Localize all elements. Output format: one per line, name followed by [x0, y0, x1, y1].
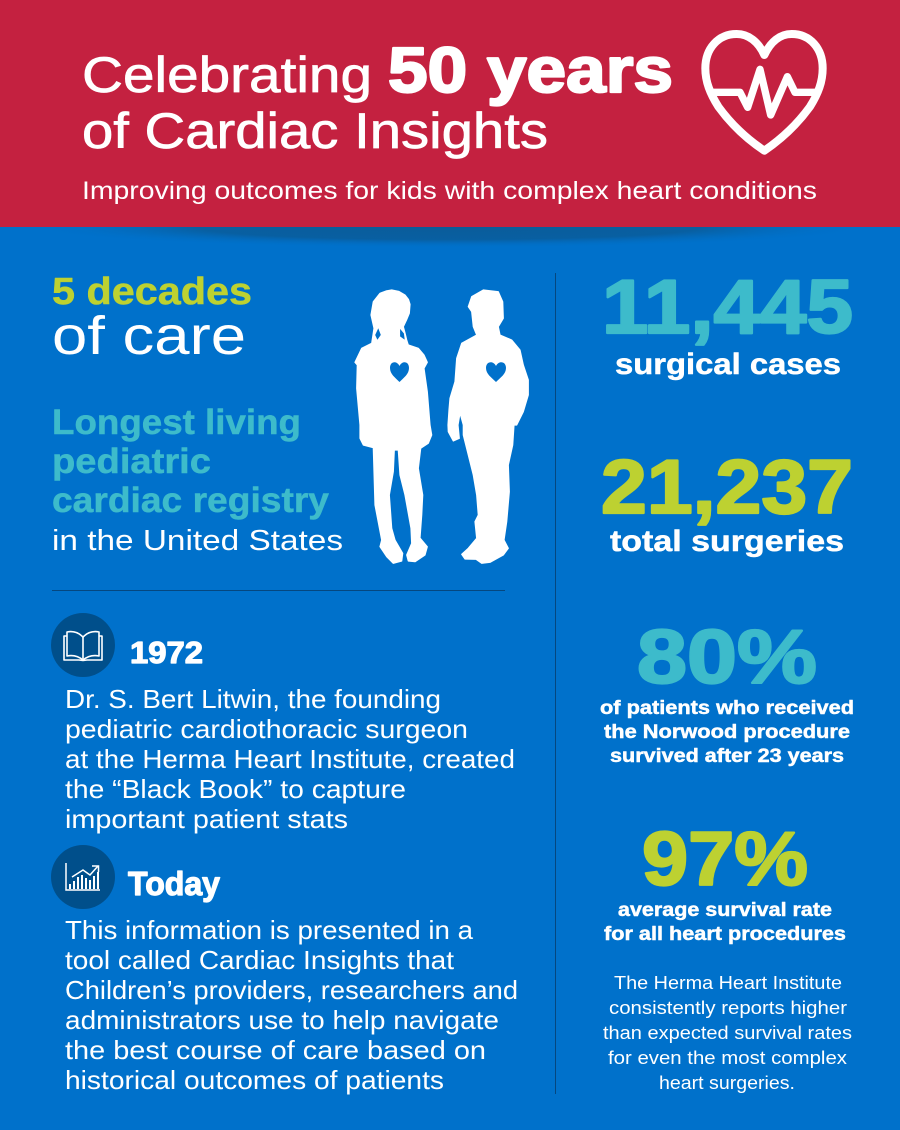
stat: surgical cases: 11,445	[602, 265, 853, 350]
text block: today description	[65, 915, 518, 1095]
text block: today description: administrators use to help navigate	[65, 1005, 499, 1035]
text block: longest living registry: pediatric	[52, 442, 211, 481]
stat: average survival: for all heart procedures	[604, 923, 846, 945]
icon: heart with pulse line	[705, 34, 823, 151]
text block: survival note: consistently reports higher	[609, 998, 847, 1018]
text block: today description: This information is presented in a	[65, 915, 474, 945]
title: of Cardiac Insights	[82, 103, 548, 159]
heading: 1972: 1972	[130, 635, 203, 670]
header banner	[0, 0, 900, 227]
icon: girl heart	[390, 362, 409, 382]
stat: average survival: average survival rate	[618, 899, 832, 921]
illustration: child silhouettes with hearts	[355, 290, 528, 563]
heading: 5 decades of care	[52, 271, 252, 366]
stat: surgical cases: surgical cases	[615, 348, 841, 381]
text block: 1972 description: Dr. S. Bert Litwin, the founding	[65, 684, 441, 714]
text block: 1972 description: at the Herma Heart Institute, created	[65, 744, 515, 774]
title: 50 years	[388, 34, 673, 106]
text block: longest living registry: in the United States	[52, 525, 343, 557]
stat: Norwood survival: 80%	[637, 615, 817, 700]
section: 1972	[51, 613, 515, 834]
text block: 1972 description	[65, 684, 515, 834]
text block: longest living registry: cardiac registry	[52, 481, 330, 520]
icon: rising chart	[51, 845, 115, 909]
text block: 1972 description: pediatric cardiothoracic surgeon	[65, 714, 468, 744]
text block: survival note: heart surgeries.	[659, 1073, 795, 1093]
text block: today description: Children’s providers, researchers and	[65, 975, 518, 1005]
section: today	[51, 845, 518, 1095]
icon: open book	[51, 613, 115, 677]
text block: today description: the best course of care based on	[65, 1035, 486, 1065]
text block: 1972 description: the “Black Book” to capture	[65, 774, 406, 804]
stat: total surgeries: 21,237	[601, 445, 853, 530]
stat: Norwood survival	[600, 615, 854, 767]
title	[82, 34, 673, 159]
subtitle: Improving outcomes for kids with complex heart conditions	[82, 177, 817, 205]
girl silhouette	[355, 290, 432, 563]
heading: 5 decades of care: 5 decades	[52, 271, 252, 313]
stat: total surgeries: total surgeries	[610, 525, 844, 558]
stat: surgical cases	[602, 265, 853, 381]
stat: Norwood survival: of patients who received	[600, 697, 854, 719]
text block: survival note: than expected survival rates	[603, 1023, 852, 1043]
stat: Norwood survival: the Norwood procedure	[604, 721, 850, 743]
text block: survival note	[603, 973, 852, 1093]
stat: average survival	[604, 817, 846, 945]
heading: today: Today	[128, 865, 221, 902]
text block: today description: tool called Cardiac Insights that	[65, 945, 455, 975]
text block: 1972 description: important patient stats	[65, 804, 348, 834]
text block: survival note: The Herma Heart Institute	[614, 973, 842, 993]
stat: average survival: 97%	[642, 817, 808, 902]
text block: longest living registry: Longest living	[52, 403, 301, 442]
text block: survival note: for even the most complex	[608, 1048, 847, 1068]
heading: 5 decades of care: of care	[52, 306, 246, 366]
icon: boy heart	[486, 362, 506, 382]
title: Celebrating	[82, 47, 372, 103]
text block: today description: historical outcomes of patients	[65, 1065, 444, 1095]
stat: total surgeries	[601, 445, 853, 558]
stat: Norwood survival: survived after 23 years	[610, 745, 844, 767]
boy silhouette	[448, 290, 528, 563]
text block: longest living registry	[52, 403, 343, 557]
